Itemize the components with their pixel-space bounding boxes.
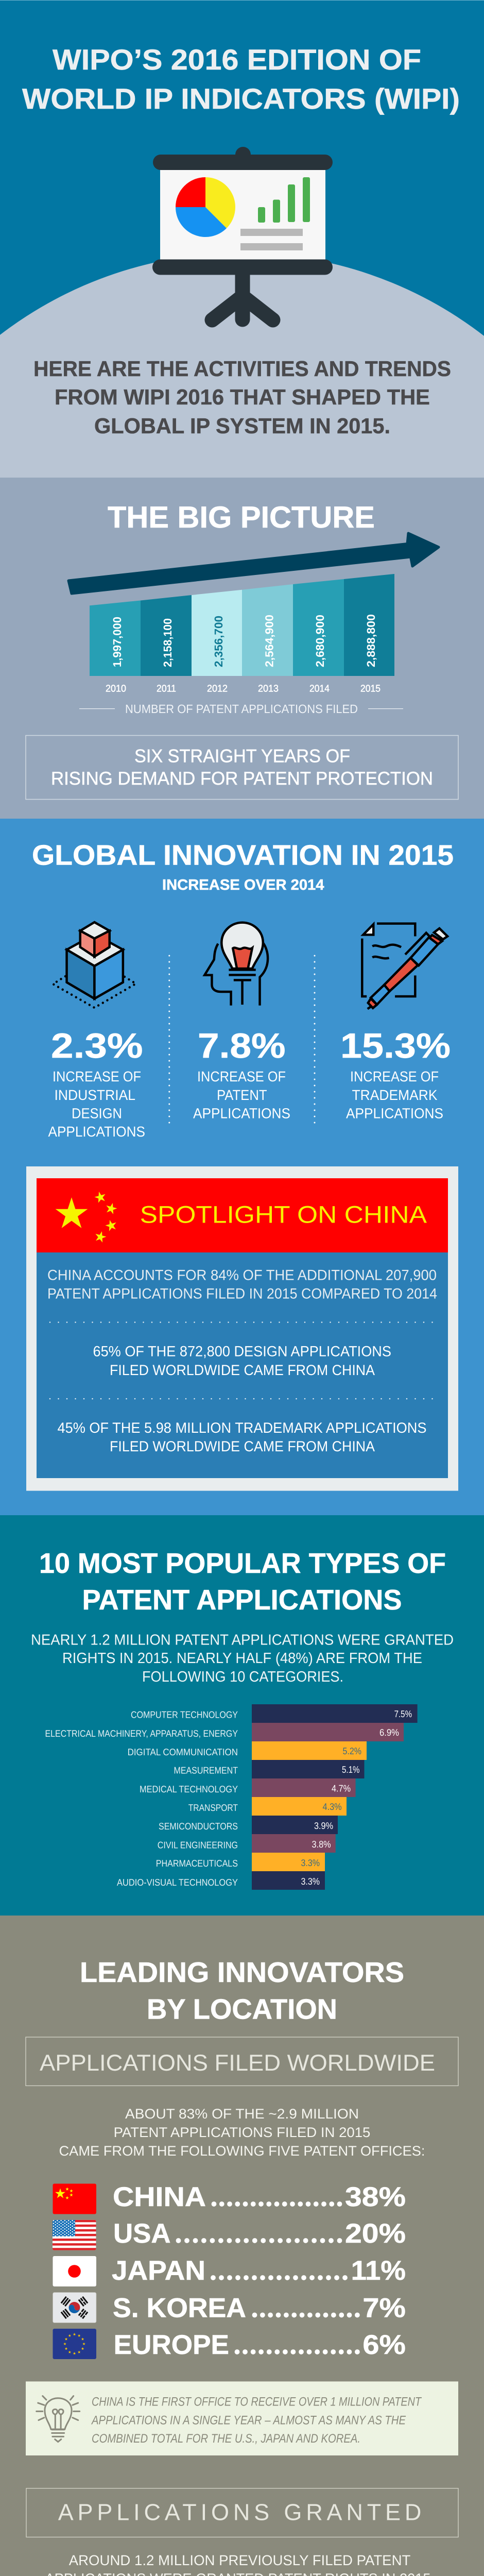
icon: head with lightbulb bbox=[204, 923, 268, 1006]
intro text: FOLLOWING 10 CATEGORIES. bbox=[142, 1669, 343, 1685]
text: applications granted bbox=[45, 2552, 435, 2576]
icon: presentation board bbox=[152, 147, 333, 320]
row: Europe filed: 6% bbox=[362, 2330, 406, 2360]
stat: industrial design: 2.3% bbox=[51, 1026, 143, 1065]
intro text: NEARLY 1.2 MILLION PATENT APPLICATIONS WERE GRANTED bbox=[31, 1632, 454, 1649]
stat: industrial design: DESIGN bbox=[72, 1106, 122, 1121]
bar chart: categories: TRANSPORT bbox=[188, 1802, 238, 1813]
subheading box: applications filed: APPLICATIONS FILED WORLDWIDE bbox=[40, 2050, 435, 2076]
stat: patent: INCREASE OF bbox=[197, 1069, 286, 1084]
row: USA filed: USA bbox=[113, 2218, 171, 2249]
bar chart: patent applications: 2015 bbox=[360, 683, 381, 694]
text: applications granted: AROUND 1.2 MILLION PREVIOUSLY FILED PATENT bbox=[69, 2552, 410, 2568]
bar chart: categories: 6.9% bbox=[379, 1727, 399, 1738]
heading: LEADING INNOVATORS bbox=[80, 1956, 404, 1988]
text: applications filed bbox=[59, 2106, 425, 2159]
row: South Korea filed bbox=[53, 2290, 406, 2324]
bar chart: categories: 3.3% bbox=[301, 1857, 320, 1868]
bar chart: categories: 4.3% bbox=[322, 1801, 342, 1812]
row: South Korea filed: 7% bbox=[362, 2293, 406, 2324]
bar chart: categories: 5.2% bbox=[343, 1745, 361, 1756]
stat: patent: PATENT bbox=[217, 1087, 267, 1103]
bar chart: patent applications: 2010 bbox=[106, 683, 126, 694]
heading: 10 MOST POPULAR TYPES OF bbox=[39, 1547, 446, 1579]
heading: PATENT APPLICATIONS bbox=[82, 1584, 402, 1616]
row: Japan filed: 11% bbox=[351, 2256, 406, 2286]
row: Europe filed bbox=[53, 2327, 406, 2361]
intro text bbox=[31, 1632, 454, 1685]
bar chart: patent applications bbox=[90, 574, 394, 694]
bar chart: patent applications: 2,564,900 bbox=[263, 615, 276, 667]
icon: blocks bbox=[53, 922, 136, 1008]
stat: industrial design: APPLICATIONS bbox=[48, 1124, 145, 1140]
panel: header bbox=[0, 0, 484, 478]
stat: industrial design: INDUSTRIAL bbox=[55, 1087, 135, 1103]
row: China filed: ................. bbox=[210, 2179, 343, 2213]
intro text: HERE ARE THE ACTIVITIES AND TRENDS bbox=[33, 357, 451, 381]
bar chart: patent applications: 2,158,100 bbox=[161, 618, 174, 667]
panel: the big picture bbox=[0, 478, 484, 819]
callout: six straight years: SIX STRAIGHT YEARS OF bbox=[134, 745, 350, 767]
heading: THE BIG PICTURE bbox=[108, 500, 375, 534]
facts box: 65% OF THE 872,800 DESIGN APPLICATIONS bbox=[93, 1344, 391, 1360]
text: applications filed: CAME FROM THE FOLLOWING FIVE PATENT OFFICES: bbox=[59, 2143, 425, 2159]
heading bbox=[80, 1956, 404, 2025]
icon: document and pen bbox=[362, 924, 447, 1009]
row: Japan filed: JAPAN bbox=[112, 2256, 205, 2286]
bar chart: patent applications: 2012 bbox=[207, 683, 228, 694]
bar chart: categories: COMPUTER TECHNOLOGY bbox=[131, 1709, 238, 1720]
subheading box: applications granted: APPLICATIONS GRANTED bbox=[58, 2499, 421, 2525]
bar chart: categories: AUDIO-VISUAL TECHNOLOGY bbox=[117, 1877, 238, 1888]
bar chart: categories: ELECTRICAL MACHINERY, APPARATUS, ENERGY bbox=[45, 1728, 238, 1739]
bar chart: categories: 5.1% bbox=[342, 1764, 359, 1775]
bar chart: categories: 3.8% bbox=[312, 1839, 331, 1850]
bar chart: categories: CIVIL ENGINEERING bbox=[158, 1839, 238, 1851]
subheading box: applications filed bbox=[26, 2037, 458, 2086]
row: China filed bbox=[53, 2179, 406, 2214]
facts box bbox=[37, 1252, 448, 1478]
callout: China first office bbox=[26, 2381, 458, 2455]
stat: patent: APPLICATIONS bbox=[193, 1106, 290, 1121]
row: USA filed: 20% bbox=[345, 2218, 406, 2249]
subheading: INCREASE OVER 2014 bbox=[162, 877, 324, 893]
facts box: FILED WORLDWIDE CAME FROM CHINA bbox=[110, 1438, 375, 1455]
title: WIPO’S 2016 EDITION OF bbox=[53, 43, 421, 76]
bar chart: patent applications: 2013 bbox=[258, 683, 279, 694]
stat: patent bbox=[193, 1026, 290, 1121]
text: applications filed: ABOUT 83% OF THE ~2.9 MILLION bbox=[125, 2106, 359, 2122]
stat: trademark: APPLICATIONS bbox=[346, 1106, 443, 1121]
bar chart: categories: 3.3% bbox=[301, 1876, 320, 1887]
row: Japan filed: ................. bbox=[209, 2252, 349, 2286]
stat: trademark bbox=[340, 1026, 451, 1121]
stat: patent: 7.8% bbox=[198, 1026, 286, 1065]
row: USA filed: .................... bbox=[175, 2215, 343, 2249]
panel: 10 most popular types bbox=[0, 1515, 484, 1916]
heading: BY LOCATION bbox=[147, 1993, 337, 2025]
facts box: CHINA ACCOUNTS FOR 84% OF THE ADDITIONAL 207,900 bbox=[47, 1267, 437, 1284]
bar chart: categories bbox=[45, 1704, 418, 1890]
chart caption: NUMBER OF PATENT APPLICATIONS FILED bbox=[125, 702, 358, 716]
row: Europe filed: ................ bbox=[233, 2327, 361, 2361]
panel: spotlight on China bbox=[26, 1166, 458, 1491]
row: China filed: CHINA bbox=[113, 2182, 206, 2212]
icon: idea bulb bbox=[37, 2396, 80, 2442]
banner: SPOTLIGHT ON CHINA bbox=[140, 1201, 427, 1228]
facts box: PATENT APPLICATIONS FILED IN 2015 COMPARED TO 2014 bbox=[47, 1286, 437, 1302]
bar chart: patent applications: 2,888,800 bbox=[365, 614, 377, 667]
row: USA filed bbox=[53, 2215, 406, 2250]
facts box: FILED WORLDWIDE CAME FROM CHINA bbox=[110, 1362, 375, 1379]
bar chart: categories: 4.7% bbox=[332, 1783, 351, 1794]
callout: six straight years bbox=[26, 736, 458, 800]
row: Japan filed bbox=[53, 2252, 406, 2286]
callout: China first office: CHINA IS THE FIRST OFFICE TO RECEIVE OVER 1 MILLION PATENT bbox=[92, 2395, 422, 2409]
facts box: 45% OF THE 5.98 MILLION TRADEMARK APPLICATIONS bbox=[58, 1420, 426, 1436]
subheading box: applications granted bbox=[26, 2488, 458, 2537]
row: Europe filed: EUROPE bbox=[114, 2330, 229, 2360]
callout: China first office: COMBINED TOTAL FOR THE U.S., JAPAN AND KOREA. bbox=[92, 2432, 360, 2446]
stat: trademark: 15.3% bbox=[340, 1026, 451, 1065]
bar chart: categories: 3.9% bbox=[314, 1820, 333, 1831]
heading: GLOBAL INNOVATION IN 2015 bbox=[32, 839, 454, 871]
bar chart: patent applications: 2014 bbox=[309, 683, 330, 694]
callout: China first office: APPLICATIONS IN A SINGLE YEAR – ALMOST AS MANY AS THE bbox=[91, 2413, 406, 2427]
bar chart: categories: 7.5% bbox=[394, 1708, 412, 1719]
heading bbox=[39, 1547, 446, 1616]
title: WORLD IP INDICATORS (WIPI) bbox=[22, 82, 460, 115]
stat: industrial design bbox=[48, 1026, 145, 1140]
bar chart: patent applications: 1,997,000 bbox=[111, 617, 124, 667]
intro text: FROM WIPI 2016 THAT SHAPED THE bbox=[55, 385, 430, 409]
panel: global innovation bbox=[0, 819, 484, 1515]
bar chart: categories: MEDICAL TECHNOLOGY bbox=[140, 1784, 238, 1794]
bar chart: patent applications: 2,680,900 bbox=[314, 615, 326, 667]
panel: leading innovators bbox=[0, 1916, 484, 2576]
text: applications filed: PATENT APPLICATIONS FILED IN 2015 bbox=[114, 2125, 370, 2140]
row: South Korea filed: .............. bbox=[251, 2290, 361, 2324]
bar chart: categories: SEMICONDUCTORS bbox=[159, 1821, 238, 1832]
intro text: RIGHTS IN 2015. NEARLY HALF (48%) ARE FROM THE bbox=[62, 1650, 422, 1667]
title bbox=[22, 43, 460, 115]
bar chart: categories: PHARMACEUTICALS bbox=[156, 1858, 238, 1869]
bar chart: categories: MEASUREMENT bbox=[174, 1765, 238, 1776]
intro text: GLOBAL IP SYSTEM IN 2015. bbox=[94, 414, 390, 438]
banner bbox=[37, 1178, 448, 1252]
callout: six straight years: RISING DEMAND FOR PATENT PROTECTION bbox=[51, 768, 433, 789]
stat: trademark: INCREASE OF bbox=[350, 1069, 439, 1084]
arrow bbox=[68, 533, 439, 594]
intro text bbox=[33, 357, 451, 438]
bar chart: categories: DIGITAL COMMUNICATION bbox=[128, 1747, 238, 1757]
bar chart: patent applications: 2011 bbox=[157, 683, 176, 694]
stat: industrial design: INCREASE OF bbox=[53, 1069, 141, 1084]
row: China filed: 38% bbox=[345, 2182, 406, 2212]
bar chart: patent applications: 2,356,700 bbox=[212, 616, 225, 667]
hill background bbox=[0, 253, 484, 478]
stat: trademark: TRADEMARK bbox=[352, 1087, 438, 1103]
row: South Korea filed: S. KOREA bbox=[113, 2293, 246, 2324]
